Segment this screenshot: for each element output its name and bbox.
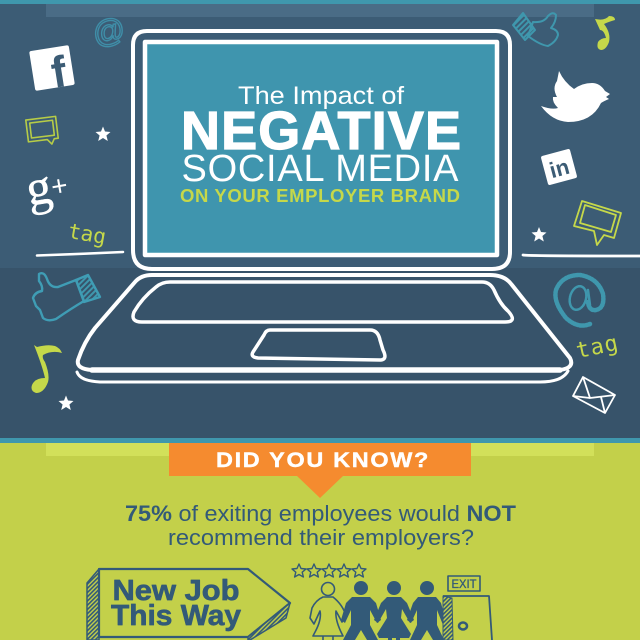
header background bbox=[0, 0, 640, 438]
new job sign: This Way bbox=[111, 600, 241, 632]
icon: google plus: g bbox=[21, 157, 56, 217]
new job sign bbox=[87, 569, 290, 640]
underline, left bbox=[37, 252, 123, 256]
exit door bbox=[443, 576, 492, 640]
icon: facebook: f bbox=[48, 47, 70, 98]
handwritten tag, left: tag bbox=[66, 219, 108, 249]
did you know banner: DID YOU KNOW? bbox=[216, 449, 430, 472]
title: NEGATIVE bbox=[181, 101, 461, 161]
icon: linkedin bbox=[541, 149, 577, 185]
title: The Impact of bbox=[238, 82, 404, 110]
icon: thumbs up, left bbox=[33, 273, 100, 320]
statistic text bbox=[125, 501, 517, 550]
icon: linkedin: in bbox=[547, 154, 572, 183]
icon: google plus: + bbox=[48, 169, 70, 202]
icon: envelope bbox=[573, 377, 615, 413]
title bbox=[180, 82, 461, 206]
icon: star, right bbox=[532, 227, 546, 242]
figure: outlined woman bbox=[310, 582, 346, 640]
icon: facebook bbox=[29, 45, 76, 101]
laptop illustration bbox=[77, 31, 571, 382]
statistic text: recommend their employers? bbox=[168, 525, 474, 550]
icon: at sign, top left: @ bbox=[90, 10, 128, 52]
title: ON YOUR EMPLOYER BRAND bbox=[180, 185, 460, 206]
icon: star, left bbox=[96, 126, 110, 141]
did you know banner bbox=[169, 443, 471, 498]
icon: thumbs up, top right bbox=[513, 13, 558, 46]
five star rating bbox=[292, 564, 366, 577]
icon: music note, top right bbox=[595, 16, 615, 50]
figures: three filled people bbox=[341, 581, 446, 640]
icon: at sign, right bbox=[555, 275, 603, 326]
handwritten tag, right: tag bbox=[574, 331, 620, 364]
icon: speech bubble, right bbox=[574, 201, 621, 245]
icon: music note, left bbox=[32, 345, 62, 393]
title: SOCIAL MEDIA bbox=[182, 148, 459, 190]
icon: twitter bird bbox=[541, 71, 610, 122]
icon: speech bubble, left bbox=[26, 116, 59, 147]
icon: star, bottom left bbox=[58, 396, 74, 410]
new job sign: New Job bbox=[112, 575, 240, 607]
statistic text: 75% of exiting employees would NOT bbox=[125, 501, 517, 526]
green section background bbox=[0, 438, 640, 640]
icon: google plus bbox=[21, 154, 72, 217]
underline, right bbox=[523, 255, 640, 256]
exit door: EXIT bbox=[452, 579, 476, 591]
